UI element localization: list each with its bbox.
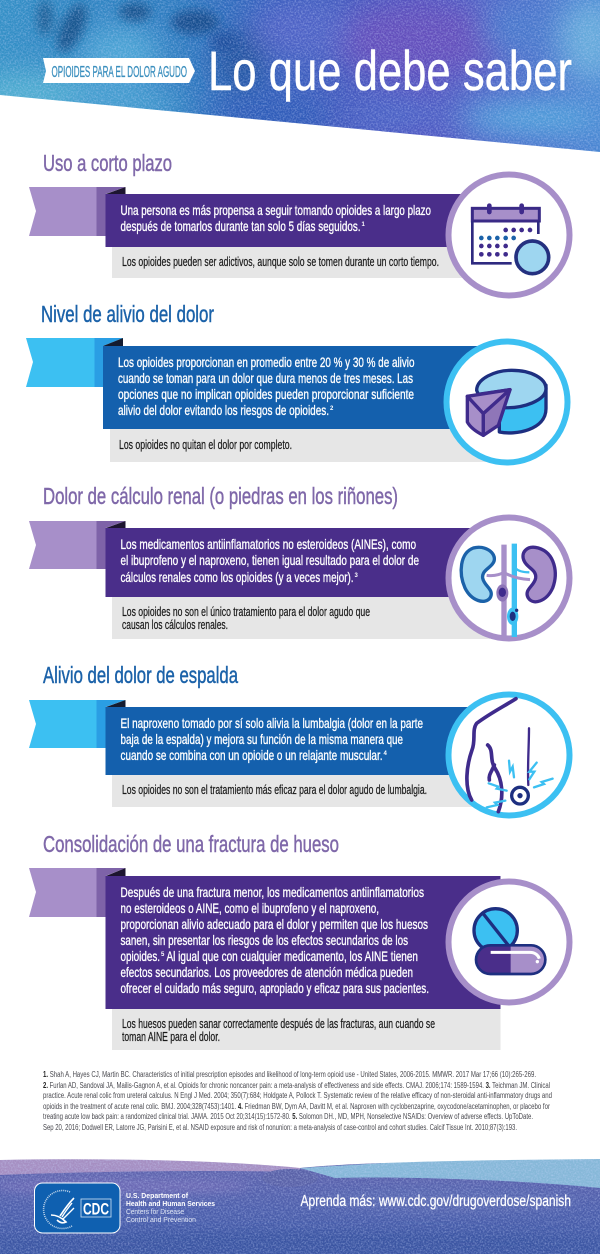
ribbon tail <box>29 700 126 748</box>
panel: consolidacion de una fractura de hueso <box>29 831 570 1050</box>
heading: consolidacion de fractura: Consolidación de una fractura de hueso <box>43 831 339 857</box>
main message band: Al igual que con cualquier medicamento, los AINE tienen <box>166 948 418 964</box>
key point bar <box>110 429 488 462</box>
key point bar <box>112 1009 500 1050</box>
icon: calendar <box>448 174 570 296</box>
main message band: Después de una fractura menor, los medicamentos antiinflamatorios <box>120 884 424 900</box>
key point bar: Los huesos pueden sanar correctamente después de las fracturas, aun cuando se <box>122 1016 435 1031</box>
ribbon tail <box>29 868 126 917</box>
agency name: Health and Human Services <box>126 1201 215 1208</box>
footer banner: watercolor <box>0 1150 600 1254</box>
key point bar: Los opioides no son el único tratamiento para el dolor agudo que <box>122 604 370 619</box>
agency name: U.S. Department of <box>126 1193 189 1200</box>
main message band: proporcionan alivio adecuado para el dolor y permiten que los huesos <box>120 916 428 932</box>
main message band: efectos secundarios. Los proveedores de atención médica pueden <box>120 964 413 980</box>
key point bar: Los opioides no quitan el dolor por completo. <box>119 437 292 452</box>
heading: dolor de calculo renal: Dolor de cálculo renal (o piedras en los riñones) <box>43 483 398 509</box>
icon: pills <box>448 882 570 1002</box>
main message band: Una persona es más propensa a seguir tomando opioides a largo plazo <box>120 202 431 218</box>
heading: uso a corto plazo: Uso a corto plazo <box>43 150 172 176</box>
main message band: 2 <box>330 406 334 412</box>
references: treating acute low back pain: a randomized clinical trial. JAMA. 2015 Oct 20;314(15):1572-80. 5. Solomon DH., MD, MPH, Nonselective NSAIDs: Overview of adverse effects. UpToDate. <box>43 1112 533 1121</box>
ribbon tail <box>29 187 126 236</box>
main message band: 3 <box>354 573 358 579</box>
icon: HHS eagle seal <box>44 1190 74 1228</box>
CDC wordmark: CDC <box>83 1200 109 1218</box>
key point bar: toman AINE para el dolor. <box>122 1029 220 1044</box>
main message band: alivio del dolor evitando los riesgos de opioides. <box>118 402 329 418</box>
header label ribbon <box>43 58 195 83</box>
main message band <box>106 707 490 775</box>
main message band: 5 <box>161 952 165 958</box>
icon: pie chart <box>446 342 568 462</box>
main message band: cálculos renales como los opioides (y a veces mejor). <box>120 569 354 585</box>
main message band <box>106 194 490 247</box>
icon: back pain <box>448 694 570 816</box>
main message band: Los opioides proporcionan en promedio entre 20 % y 30 % de alivio <box>118 354 415 370</box>
main message band <box>103 346 488 429</box>
ribbon tail <box>29 521 126 569</box>
main message band: después de tomarlos durante tan solo 5 días seguidos. <box>120 218 360 234</box>
panel: nivel de alivio del dolor <box>26 301 568 462</box>
key point bar: Los opioides pueden ser adictivos, aunque solo se tomen durante un corto tiempo. <box>122 254 439 269</box>
references: 2. Furlan AD, Sandoval JA, Mailis-Gagnon A, et al. Opioids for chronic noncancer pain: a meta-analysis of effectiveness and side effects. CMAJ. 2006;174: 1589-1594. 3. Teichman JM. Clinical <box>43 1081 550 1090</box>
main message band <box>106 876 500 1009</box>
main message band: ofrecer el cuidado más seguro, apropiado y eficaz para sus pacientes. <box>120 980 429 996</box>
header banner: watercolor <box>0 0 600 160</box>
main message band: opioides. <box>120 948 160 964</box>
heading: nivel de alivio: Nivel de alivio del dolor <box>41 301 214 327</box>
ribbon tail <box>26 338 123 387</box>
panel: dolor de calculo renal <box>29 483 570 639</box>
key point bar <box>112 597 490 639</box>
key point bar <box>112 247 490 278</box>
references <box>43 1070 552 1132</box>
panel: alivio del dolor de espalda <box>29 662 570 816</box>
main message band: sanen, sin presentar los riesgos de los efectos secundarios de los <box>120 932 408 948</box>
heading: alivio del dolor de espalda: Alivio del dolor de espalda <box>43 662 238 688</box>
header label ribbon: OPIOIDES PARA EL DOLOR AGUDO <box>52 64 187 81</box>
main message band: opciones que no implican opioides pueden proporcionar suficiente <box>118 386 414 402</box>
main message band: cuando se combina con un opioide o un relajante muscular. <box>120 747 382 763</box>
main message band: cuando se toman para un dolor que dura menos de tres meses. Las <box>118 370 413 386</box>
panel: uso a corto plazo <box>29 150 570 296</box>
agency name <box>126 1193 215 1224</box>
key point bar: Los opioides no son el tratamiento más eficaz para el dolor agudo de lumbalgia. <box>122 782 427 797</box>
main message band: Los medicamentos antiinflamatorios no esteroideos (AINEs), como <box>120 536 416 552</box>
key point bar <box>112 775 490 807</box>
main message band <box>106 528 490 597</box>
main message band: baja de la espalda) y mejora su función de la misma manera que <box>120 731 403 747</box>
CDC logo <box>34 1183 120 1233</box>
main message band: 4 <box>384 751 388 757</box>
main message band: 1 <box>362 222 366 228</box>
agency name: Control and Prevention <box>126 1217 196 1224</box>
key point bar: causan los cálculos renales. <box>122 617 228 632</box>
icon: kidneys <box>448 518 570 638</box>
main message band: no esteroideos o AINE, como el ibuprofeno y el naproxeno, <box>120 900 379 916</box>
agency name: Centers for Disease <box>126 1209 184 1216</box>
main message band: el ibuprofeno y el naproxeno, tienen igual resultado para el dolor de <box>120 552 419 568</box>
main message band: El naproxeno tomado por sí solo alivia la lumbalgia (dolor en la parte <box>120 715 423 731</box>
